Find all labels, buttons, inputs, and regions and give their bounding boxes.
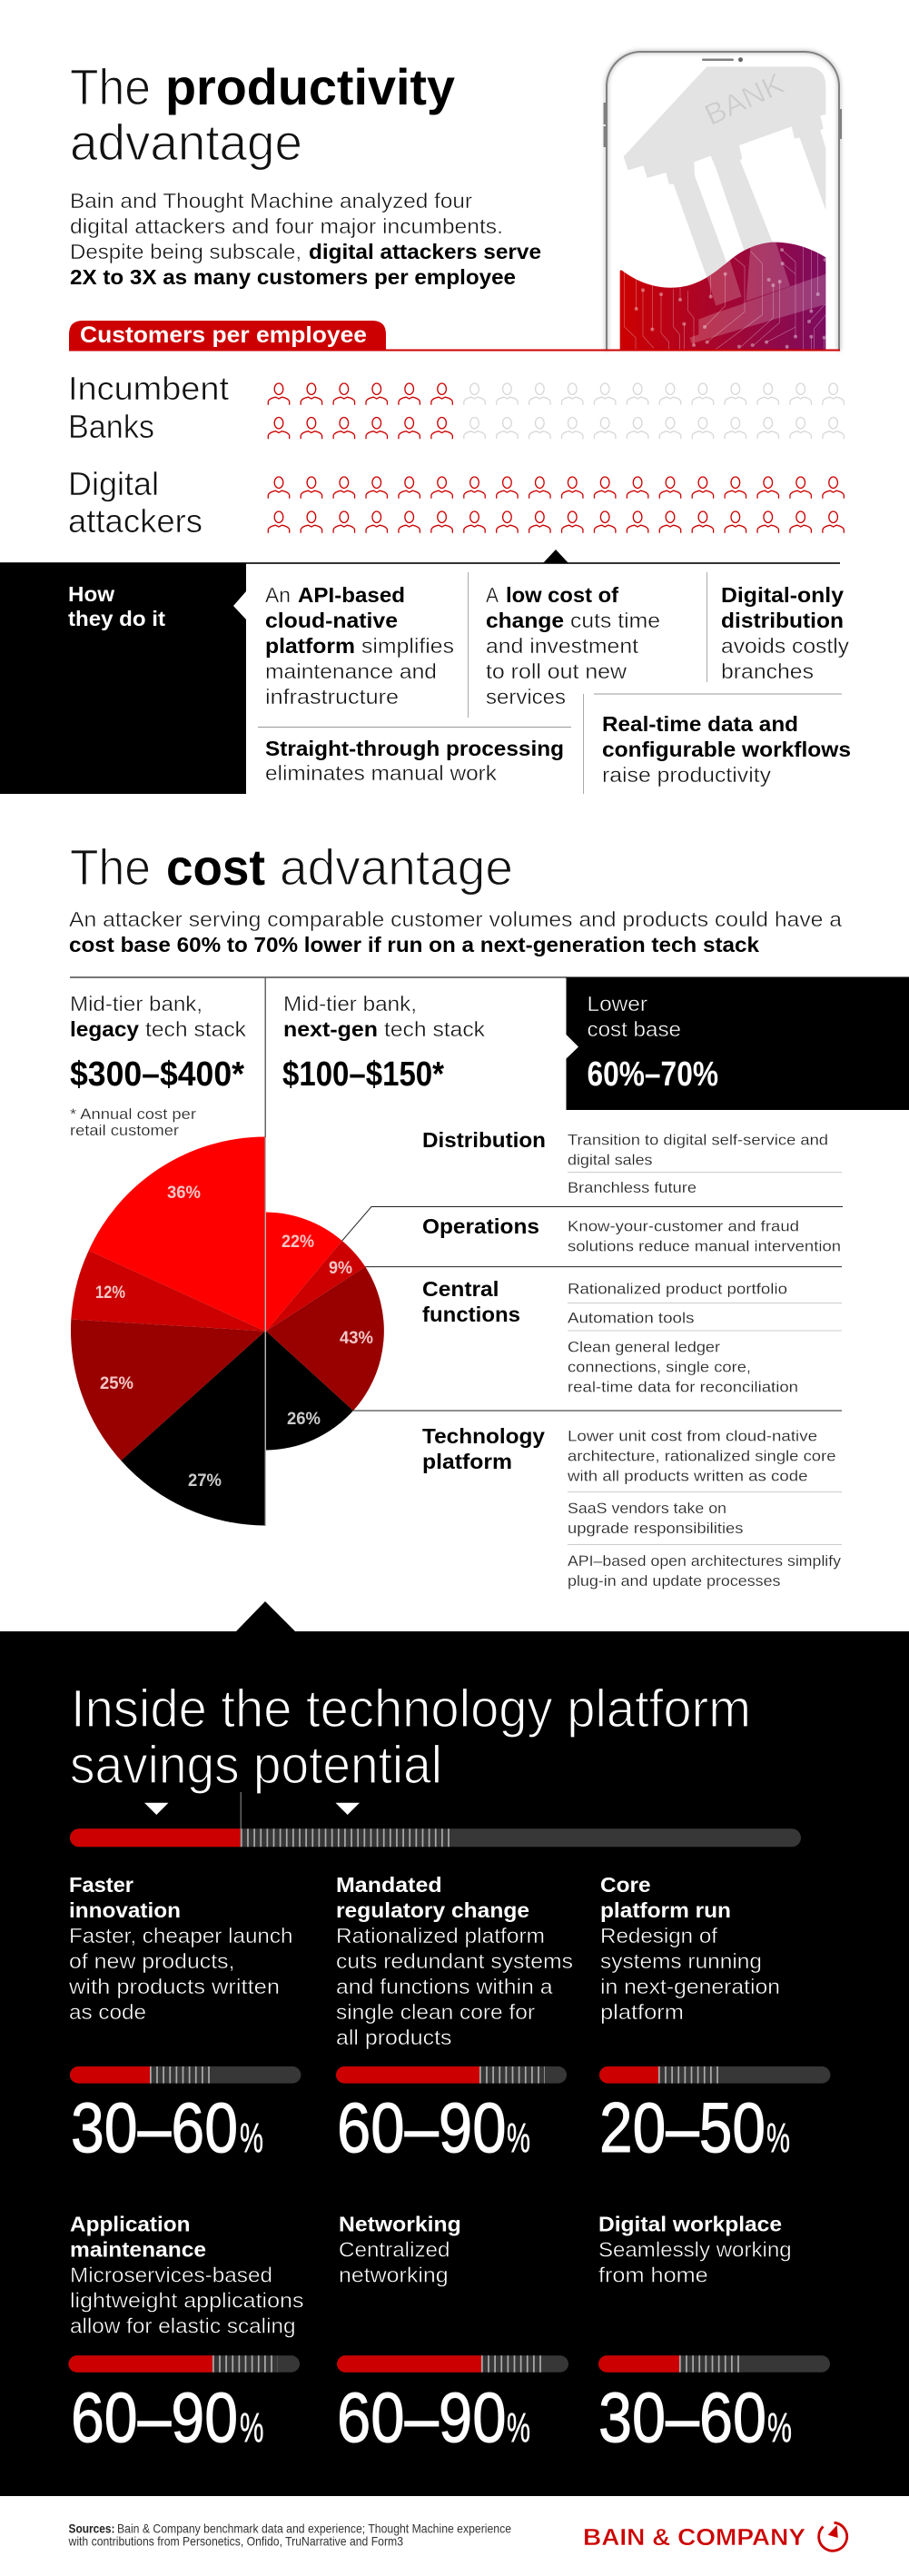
cost paragraph: An attacker serving comparable customer volumes and products could have a bbox=[69, 907, 842, 931]
list: operations: solutions reduce manual intervention bbox=[568, 1237, 841, 1255]
column: digital workplace: Seamlessly working bbox=[598, 2238, 792, 2262]
column: legacy tech stack cost: tech stack bbox=[145, 1017, 247, 1041]
column: application maintenance: allow for elastic scaling bbox=[70, 2314, 296, 2338]
list: central functions: real-time data for reconciliation bbox=[568, 1379, 798, 1395]
list: distribution: digital sales bbox=[568, 1152, 652, 1168]
column: next-gen tech stack cost: tech stack bbox=[384, 1017, 486, 1041]
title: the productivity advantage bbox=[70, 58, 455, 171]
panel: how they do it: they do it bbox=[68, 607, 165, 630]
list: operations: Know-your-customer and fraud bbox=[568, 1217, 799, 1235]
text: API-based platform: simplifies bbox=[361, 634, 454, 658]
list: distribution: Branchless future bbox=[568, 1179, 697, 1196]
list: operations: Operations bbox=[422, 1214, 539, 1238]
text: digital-only distribution: Digital-only bbox=[721, 583, 844, 607]
column: application maintenance: Application bbox=[70, 2213, 191, 2236]
text: low cost of change: cuts time bbox=[570, 609, 660, 632]
panel: lower cost base bbox=[567, 977, 909, 1110]
title: the productivity advantage: The bbox=[70, 58, 151, 115]
text: real-time data: configurable workflows bbox=[602, 738, 851, 761]
column: legacy tech stack cost: Mid-tier bank, bbox=[70, 992, 203, 1016]
column: faster innovation: Faster bbox=[69, 1873, 133, 1897]
column: core platform run: systems running bbox=[600, 1949, 762, 1973]
text: API-based platform: infrastructure bbox=[265, 685, 399, 708]
column: mandated regulatory change bbox=[336, 1873, 573, 2167]
title: the cost advantage: The bbox=[70, 838, 151, 896]
column: mandated regulatory change: and functions within a bbox=[336, 1975, 553, 1998]
list: central functions: Automation tools bbox=[568, 1310, 694, 1326]
chart: legacy cost pie: 36% bbox=[167, 1184, 201, 1203]
column: digital workplace: from home bbox=[598, 2264, 708, 2287]
list: technology platform: architecture, rationalized single core bbox=[568, 1448, 835, 1464]
panel: lower cost base: cost base bbox=[587, 1017, 681, 1041]
chart: next-gen cost pie: 9% bbox=[329, 1259, 352, 1278]
row label: incumbent banks: Incumbent bbox=[68, 370, 229, 407]
title: the cost advantage: advantage bbox=[280, 838, 513, 896]
column: application maintenance: 60–90 bbox=[71, 2377, 238, 2457]
panel: how they do it: How bbox=[68, 582, 114, 606]
panel: inside the technology platform bbox=[0, 1601, 909, 2496]
column: application maintenance: Microservices-based bbox=[70, 2264, 272, 2287]
text: straight-through processing bbox=[265, 737, 564, 785]
column: core platform run: platform bbox=[600, 2000, 684, 2024]
column: core platform run: in next-generation bbox=[600, 1975, 780, 1998]
icon: phone with bank and circuit wave: BANK bbox=[699, 66, 789, 132]
intro paragraph: digital attackers serve bbox=[309, 240, 541, 263]
row label: digital attackers: attackers bbox=[68, 502, 203, 540]
column: networking: Networking bbox=[339, 2213, 461, 2236]
chart: next-gen cost pie: 26% bbox=[287, 1410, 321, 1429]
list: distribution bbox=[422, 1128, 842, 1196]
title: the cost advantage: cost bbox=[166, 838, 265, 896]
text: API-based platform: API-based bbox=[298, 583, 405, 607]
sources note bbox=[68, 2521, 511, 2549]
column: networking: networking bbox=[339, 2264, 449, 2287]
column: legacy tech stack cost: legacy bbox=[70, 1017, 139, 1041]
text: digital-only distribution bbox=[721, 583, 850, 683]
column: networking: Centralized bbox=[339, 2238, 450, 2262]
list: central functions: Central bbox=[422, 1277, 499, 1301]
list: central functions: functions bbox=[422, 1303, 520, 1326]
column: next-gen tech stack cost: $100–$150* bbox=[282, 1055, 444, 1094]
list: central functions bbox=[422, 1277, 842, 1395]
text: API-based platform: cloud-native bbox=[265, 609, 398, 632]
bar: overall savings potential bbox=[70, 1792, 801, 1847]
intro paragraph: Despite being subscale, bbox=[70, 240, 301, 263]
list: technology platform: Lower unit cost from cloud-native bbox=[568, 1428, 817, 1444]
intro paragraph: digital attackers and four major incumbents. bbox=[70, 214, 503, 238]
sources note: Sources: bbox=[69, 2521, 114, 2535]
column: faster innovation: 30–60 bbox=[71, 2087, 238, 2167]
column: mandated regulatory change: all products bbox=[336, 2026, 452, 2049]
column: legacy tech stack cost: * Annual cost per bbox=[70, 1105, 196, 1123]
column: networking bbox=[337, 2213, 568, 2457]
title: inside the technology platform: savings potential bbox=[70, 1736, 442, 1795]
row label: digital attackers: Digital bbox=[68, 465, 159, 502]
column: faster innovation: Faster, cheaper launch bbox=[69, 1924, 292, 1947]
text: low cost of change: services bbox=[486, 685, 566, 708]
text: API-based platform: platform bbox=[265, 634, 355, 658]
column: faster innovation: of new products, bbox=[69, 1949, 234, 1973]
sources note: Bain & Company benchmark data and experience; Thought Machine experience bbox=[117, 2521, 511, 2535]
heading tab: customers per employee bbox=[69, 321, 840, 351]
text: API-based platform bbox=[265, 583, 454, 708]
column: core platform run: % bbox=[766, 2115, 790, 2161]
intro paragraph: Bain and Thought Machine analyzed four bbox=[70, 189, 472, 213]
column: core platform run: platform run bbox=[600, 1898, 731, 1922]
list: technology platform: plug-in and update processes bbox=[568, 1572, 781, 1590]
chart: legacy cost pie: 12% bbox=[95, 1283, 125, 1303]
list: technology platform: with all products written as code bbox=[567, 1468, 808, 1484]
pictogram: digital attackers customers bbox=[268, 477, 844, 533]
text: low cost of change: to roll out new bbox=[486, 659, 627, 683]
text: low cost of change: low cost of bbox=[506, 583, 618, 607]
intro paragraph: 2X to 3X as many customers per employee bbox=[70, 265, 516, 289]
column: digital workplace: 30–60 bbox=[598, 2377, 766, 2457]
row label: incumbent banks: Banks bbox=[68, 408, 154, 445]
list: technology platform: API–based open architectures simplify bbox=[568, 1552, 842, 1570]
icon: phone with bank and circuit wave bbox=[605, 52, 841, 351]
title: the cost advantage bbox=[70, 838, 513, 896]
intro paragraph bbox=[70, 189, 541, 289]
list: technology platform: upgrade responsibilities bbox=[568, 1520, 743, 1537]
column: mandated regulatory change: cuts redundant systems bbox=[336, 1949, 573, 1973]
text: digital-only distribution: distribution bbox=[721, 609, 844, 632]
column: mandated regulatory change: % bbox=[507, 2115, 530, 2161]
column: application maintenance: maintenance bbox=[70, 2238, 206, 2262]
text: low cost of change bbox=[486, 583, 660, 708]
column: core platform run: Core bbox=[600, 1873, 650, 1897]
text: straight-through processing: eliminates manual work bbox=[265, 761, 498, 785]
text: API-based platform: An bbox=[265, 583, 291, 607]
list: central functions: Clean general ledger bbox=[568, 1339, 720, 1355]
text: real-time data: Real-time data and bbox=[602, 712, 798, 736]
column: faster innovation: innovation bbox=[69, 1898, 181, 1922]
list: distribution: Transition to digital self-service and bbox=[568, 1132, 828, 1148]
chart: next-gen cost pie: 22% bbox=[282, 1233, 314, 1252]
column: legacy tech stack cost bbox=[70, 976, 567, 1139]
heading tab: customers per employee: Customers per employee bbox=[80, 322, 367, 348]
list: operations bbox=[422, 1214, 841, 1255]
cost paragraph: cost base 60% to 70% lower if run on a next-generation tech stack bbox=[69, 933, 759, 956]
sources note: with contributions from Personetics, Onfido, TruNarrative and Form3 bbox=[68, 2534, 403, 2549]
logo: Bain & Company bbox=[583, 2522, 847, 2551]
cost paragraph bbox=[69, 907, 842, 956]
column: faster innovation: as code bbox=[69, 2000, 146, 2024]
text: low cost of change: and investment bbox=[486, 634, 639, 658]
column: core platform run bbox=[599, 1873, 830, 2167]
text: low cost of change: change bbox=[486, 609, 564, 632]
text: digital-only distribution: branches bbox=[721, 659, 814, 683]
row label: digital attackers bbox=[68, 465, 203, 540]
pictogram: incumbent banks customers bbox=[268, 383, 844, 439]
text: digital-only distribution: avoids costly bbox=[721, 634, 850, 658]
column: core platform run: Redesign of bbox=[600, 1924, 718, 1947]
column: legacy tech stack cost: $300–$400* bbox=[70, 1055, 244, 1094]
column: digital workplace bbox=[598, 2213, 830, 2457]
panel: how they do it bbox=[0, 550, 851, 794]
list: distribution: Distribution bbox=[422, 1128, 546, 1152]
column: networking: % bbox=[507, 2404, 530, 2451]
column: mandated regulatory change: 60–90 bbox=[337, 2087, 507, 2167]
chart: legacy cost pie: 25% bbox=[100, 1374, 133, 1393]
column: next-gen tech stack cost: Mid-tier bank, bbox=[283, 992, 417, 1016]
column: digital workplace: Digital workplace bbox=[598, 2213, 782, 2236]
column: mandated regulatory change: single clean core for bbox=[336, 2000, 535, 2024]
text: straight-through processing: Straight-through processing bbox=[265, 737, 564, 760]
text: real-time data: raise productivity bbox=[602, 763, 772, 787]
column: mandated regulatory change: regulatory change bbox=[336, 1898, 529, 1922]
column: core platform run: 20–50 bbox=[599, 2087, 766, 2167]
column: mandated regulatory change: Mandated bbox=[336, 1873, 442, 1897]
chart: next-gen cost pie bbox=[265, 1137, 843, 1526]
column: application maintenance: % bbox=[240, 2404, 263, 2451]
row label: incumbent banks bbox=[68, 370, 229, 445]
title: inside the technology platform: Inside the technology platform bbox=[71, 1679, 751, 1739]
chart: legacy cost pie bbox=[71, 1137, 265, 1526]
text: low cost of change: A bbox=[486, 583, 499, 607]
column: next-gen tech stack cost: next-gen bbox=[283, 1017, 378, 1041]
column: faster innovation: with products written bbox=[68, 1975, 280, 1998]
column: mandated regulatory change: Rationalized platform bbox=[336, 1924, 545, 1947]
column: faster innovation bbox=[68, 1873, 301, 2167]
text: real-time data bbox=[602, 712, 851, 787]
list: technology platform: SaaS vendors take on bbox=[568, 1500, 726, 1517]
title: the productivity advantage: advantage bbox=[70, 114, 302, 171]
column: networking: 60–90 bbox=[337, 2377, 507, 2457]
list: central functions: Rationalized product portfolio bbox=[568, 1281, 787, 1297]
text: API-based platform: maintenance and bbox=[265, 659, 437, 683]
title: inside the technology platform bbox=[70, 1679, 751, 1795]
list: technology platform: platform bbox=[422, 1450, 512, 1473]
column: application maintenance: lightweight applications bbox=[70, 2289, 303, 2313]
column: legacy tech stack cost: retail customer bbox=[70, 1122, 179, 1139]
panel: lower cost base: 60%–70% bbox=[587, 1055, 718, 1094]
list: technology platform: Technology bbox=[422, 1424, 545, 1448]
panel: lower cost base: Lower bbox=[587, 992, 647, 1016]
column: faster innovation: % bbox=[240, 2115, 263, 2161]
title: the productivity advantage: productivity bbox=[165, 58, 455, 115]
column: application maintenance bbox=[68, 2213, 304, 2457]
chart: next-gen cost pie: 43% bbox=[340, 1329, 373, 1348]
list: technology platform bbox=[422, 1424, 842, 1590]
column: digital workplace: % bbox=[767, 2404, 792, 2451]
chart: legacy cost pie: 27% bbox=[188, 1471, 222, 1491]
column: next-gen tech stack cost bbox=[282, 992, 486, 1094]
list: central functions: connections, single core, bbox=[568, 1359, 751, 1375]
logo: Bain & Company: BAIN & COMPANY bbox=[583, 2525, 805, 2551]
